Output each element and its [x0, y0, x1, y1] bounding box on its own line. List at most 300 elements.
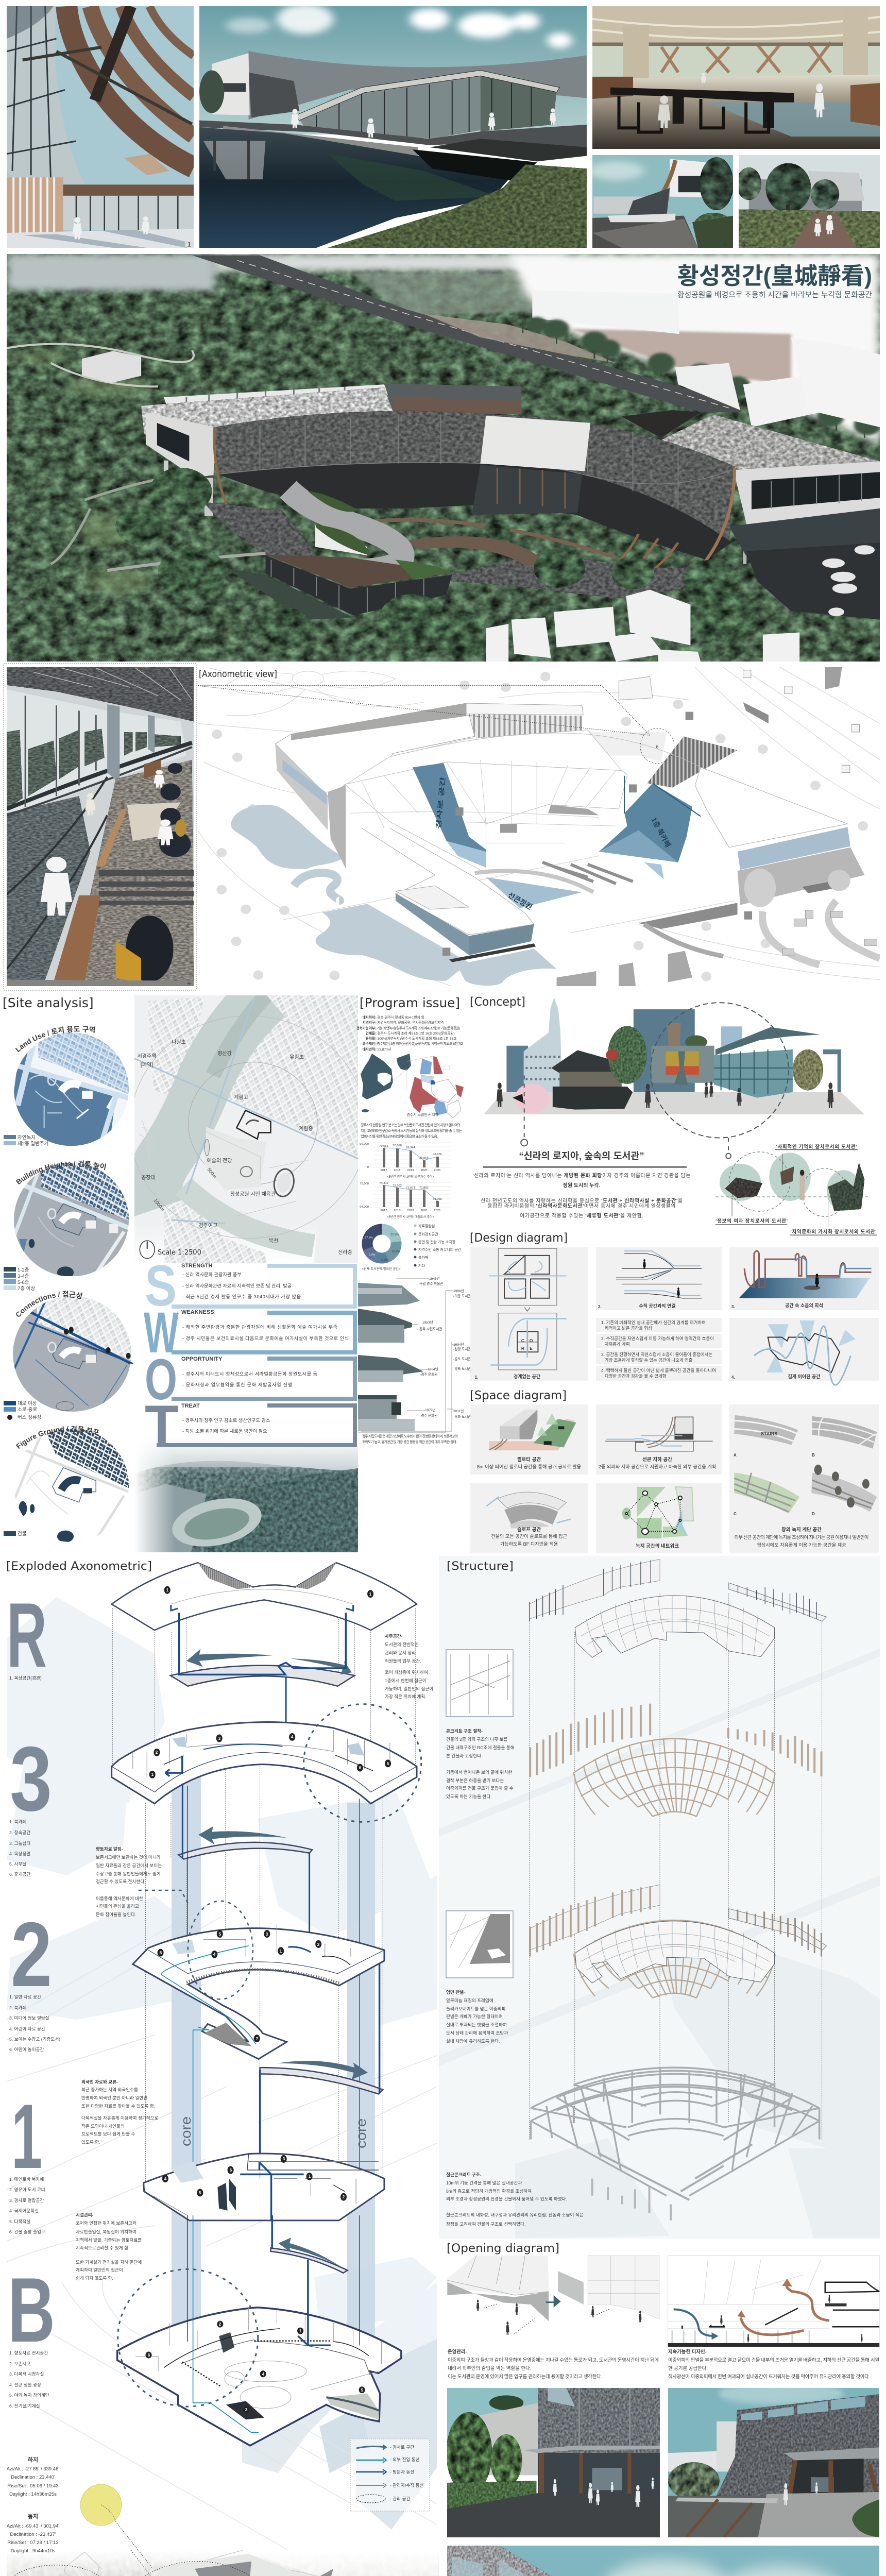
bar chart: visitors: <5년간 경주시 1관당 방문자수 추이>: [387, 1175, 435, 1179]
bar chart: visitors: 43,476: [433, 1153, 442, 1156]
bar chart: book loans: 72,882: [419, 1187, 429, 1190]
map labels: 경주여고: [199, 1222, 217, 1229]
annotation: local materials: 접근할 수 있도록 전시한다.: [96, 1878, 146, 1884]
history of Gyeongju libraries timeline: -의동 도서관: [453, 1294, 471, 1298]
donut chart: 27.6%: [365, 1236, 373, 1240]
space diagram panels: 평상시에도 자유롭게 이용 가능한 공간을 제공: [757, 1543, 846, 1548]
annotation: foreign materials: 또한 다양한 자료를 찾아볼 수 있도록 함.: [81, 2103, 155, 2109]
dotted frame around interior photo: [4, 664, 196, 990]
annotation: foreign materials: 반영하여 외국인 뿐만 아니라 일반인: [81, 2095, 147, 2100]
SWOT text: OPPORTUNITY: [181, 1356, 223, 1362]
room list texts: 6. 휴게공간: [9, 1872, 30, 1877]
annotation: facility management: [76, 2212, 142, 2281]
SWOT text: [181, 1263, 349, 1434]
room number markers on floor plates: 7: [256, 2037, 259, 2041]
space diagram: slope: [486, 1492, 571, 1529]
bar chart: book loans: 2019: [407, 1209, 414, 1212]
opening text: operation management: 운영관리-: [448, 2349, 467, 2354]
annotation: local materials: 문화 참여율을 높인다.: [96, 1911, 136, 1917]
map labels: 나원초: [172, 1039, 186, 1045]
bar chart: visitors: 2017: [381, 1169, 387, 1172]
panel: axonometric view: 6: [656, 744, 659, 749]
design description list: 3. 공간을 진행하면서 지연스럽게 소음이 줄어들어 종점에서는: [601, 1352, 712, 1357]
floor letters and room lists: 1: [11, 2085, 42, 2188]
design diagram panels: C: [521, 1338, 524, 1343]
text: connections title and legend: 대로 이상: [18, 1401, 37, 1406]
space diagram panels: C: [734, 1512, 737, 1516]
room number markers on floor plates: 6: [148, 2353, 150, 2358]
structure heading: [Structure]: [447, 1560, 514, 1573]
donut chart: 15.8%: [380, 1259, 388, 1262]
design description list: 1. 기존의 폐쇄적인 실내 공간에서 실간의 경계를 제거하여: [601, 1320, 706, 1325]
structure background shapes: [439, 1649, 880, 2239]
text: building heights title and legend: 7층 이상: [18, 1286, 35, 1292]
design diagram panels: O: [530, 1338, 533, 1343]
heading: space diagram: [Space diagram]: [470, 1389, 567, 1402]
bar chart: book loans: 2021: [434, 1209, 440, 1212]
annotation: local materials: 일반 자료들과 같은 공간에서 보이는: [96, 1862, 162, 1868]
room list texts: 3. 경사로 열람공간: [9, 2197, 44, 2203]
axonometric labels: [199, 669, 672, 911]
photo 1: interior facade with wooden ribs: 1: [187, 241, 191, 248]
site data table: 대지면적: [363, 1047, 375, 1052]
map labels: 신라중: [338, 1249, 352, 1256]
space diagram: green network: [622, 1487, 693, 1538]
photo: entrance under facade, left: [446, 2388, 660, 2537]
floor letters and room lists: [7, 1584, 60, 2409]
text: building heights title and legend: 5-6층: [18, 1280, 29, 1285]
loose columns: [592, 2179, 671, 2221]
map of Korea and Gyeongju: [361, 1054, 464, 1118]
history of Gyeongju libraries timeline: -경주 문화원: [420, 1413, 437, 1418]
text: building heights title and legend: [4, 1160, 106, 1292]
room list texts: 3. 다목적 시청각실: [9, 2371, 44, 2377]
structure text: facade panel: 입면 판넬-: [446, 1989, 465, 1995]
diagram 4: spaces connected by path: [754, 1320, 856, 1385]
space diagram panels: 창의 녹지 계단 공간: [781, 1527, 822, 1533]
SWOT analysis: [144, 1253, 355, 1458]
site data table: | 가능(자연녹지)/경주시 도시계획 조례 제45조의3호 가능(문화공원): [376, 1026, 460, 1030]
room number markers on floor plates: [148, 1588, 389, 2412]
room number markers on floor plates: 1: [299, 2329, 302, 2333]
room list texts: 1. 향토자료 전시공간: [9, 2350, 48, 2355]
annotation: office space: 도서관의 전반적인: [385, 1641, 419, 1647]
room list texts: 1. 옥상공간(경관): [9, 1675, 42, 1681]
bar chart: book loans: 64,000: [360, 1206, 369, 1209]
circle map: connections: [13, 1296, 133, 1412]
concept sub diagram: three library roles: '사회적인 기억의 장치로서의 도서관': [776, 1144, 857, 1150]
design diagram panels: 3.: [731, 1304, 735, 1309]
history of Gyeongju libraries timeline: 1945년: [429, 1276, 440, 1281]
SWOT text: - 신라 역사문화 관광자원 풍부: [182, 1272, 242, 1277]
circle map: building heights: [14, 1163, 129, 1276]
room number markers on floor plates: 1: [309, 2174, 311, 2179]
SWOT text: - 경주시의 미래도시 정체성으로서 서라벌황금문화 정원도시를 둠: [182, 1371, 317, 1377]
label: north library: 경사로 공간: [435, 776, 447, 829]
structure text: reinforced concrete: 장점을 고려하여 건물의 구조로 선택하였다.: [446, 2221, 525, 2227]
space diagram: piloti: [489, 1410, 576, 1450]
structure text: facade panel: 실내 채광에 유리하도록 한다.: [446, 2038, 500, 2044]
concept statement: 여가공간으로 작용할 수있는 '체류형 도서관'을 제안함.: [520, 1212, 643, 1219]
detail inset boxes: [446, 1650, 513, 1978]
site data table: | 33,870㎡: [376, 1047, 391, 1052]
donut chart: [362, 1224, 462, 1271]
hero subtitle: 황성공원을 배경으로 조용히 시간을 바라보는 누각형 문화공간: [677, 291, 872, 299]
bar chart: visitors: 2018: [394, 1169, 400, 1172]
opening text: operation management: 내려서 외부인의 출입을 막는 역할을 한다.: [448, 2365, 531, 2371]
text: connections title and legend: Connections / 접근성: [16, 1291, 82, 1317]
room list texts: 2. 북카페: [9, 2005, 26, 2010]
design diagram panels: 1.: [475, 1375, 478, 1380]
room list texts: 5. 다목적실: [9, 2218, 30, 2224]
opening diagram: operation: [447, 2256, 659, 2335]
design diagram panels: E: [530, 1346, 533, 1351]
structure text: concrete anchor: [446, 1728, 515, 1799]
diagram 3: immersion of forest sound: [739, 1251, 872, 1298]
annotation: facility management: 지역에서 발굴, 기증되는 향토자료를: [76, 2237, 142, 2243]
history of Gyeongju libraries timeline: 경주 시립도서관은 개관 72년째로 노후화가 많이 진행된 상태이며, 보존서고의: [362, 1434, 458, 1438]
site data table: | 경북 경주시 황성동 954-1번지 외: [376, 1015, 424, 1020]
bar chart: book loans: 74,411: [379, 1182, 388, 1185]
structure text: facade panel: 판넬은 개폐가 가능한 형태이며: [446, 2013, 503, 2019]
solar data text: Declination : -23.437': [10, 2532, 56, 2537]
donut legend: 북카페: [418, 1255, 428, 1260]
text: figure ground title and legend: Figure Ground / 건물 분포: [15, 1426, 99, 1449]
heading: program issue: [Program issue]: [360, 995, 460, 1010]
legend: circulation types: - 외부 진입 동선: [390, 2456, 419, 2462]
room list texts: 6. 건물 중앙 출입구: [9, 2229, 45, 2234]
site data table: | 자연녹지지역, 문화공원, 역사문화환경보존지역: [376, 1020, 444, 1025]
bar chart: visitors: 0: [367, 1166, 369, 1169]
opening text: sustainable design: 한 공기를 공급한다.: [668, 2365, 708, 2371]
room number markers on floor plates: 3: [218, 1736, 221, 1741]
annotation: facility management: 계획하여 일반인의 접근이: [76, 2267, 123, 2273]
design description list: 4. 빽빽하게 들친 공간이 아닌 넓게 흩뿌려진 공간을 돌아다니며: [601, 1368, 716, 1373]
room number markers on floor plates: 5: [199, 2191, 201, 2195]
opening text: sustainable design: [668, 2349, 879, 2379]
structure text: concrete anchor: 있도록 하는 기능을 한다.: [446, 1793, 492, 1799]
room list texts: 5. 보이는 수장고 (기증도서): [9, 2037, 60, 2042]
design diagram panels: 4.: [731, 1375, 735, 1380]
room list texts: 4. 선큰 정원 광장: [9, 2382, 41, 2387]
map labels: [폐역]: [141, 1062, 153, 1068]
bar chart: visitors: 69,344: [406, 1146, 416, 1149]
map labels: 500m: [206, 1167, 217, 1179]
solar data text: 동지: [28, 2513, 38, 2520]
SWOT letters: W: [144, 1300, 179, 1365]
map labels: 1000m: [152, 1198, 165, 1212]
map labels: 공장대: [141, 1175, 156, 1181]
annotation: facility management: 지속적으로관리할 수 있게 함.: [76, 2245, 129, 2250]
photo 6: long curved reading corridor: [7, 667, 194, 986]
solar data text: 하지: [28, 2456, 38, 2463]
annotation: office space: 코어 최상층에 위치하여: [385, 1669, 428, 1675]
concept statement: [473, 1150, 690, 1219]
annotation: foreign materials: [81, 2079, 159, 2145]
site data table: [356, 1015, 463, 1052]
room number markers on floor plates: 1: [166, 1588, 169, 1592]
design diagram panels: [470, 1247, 879, 1385]
history of Gyeongju libraries timeline: 1994년: [453, 1342, 464, 1347]
core columns: [172, 1773, 375, 2353]
heading: design diagram: [Design diagram]: [470, 1231, 568, 1245]
map labels: 계림고: [234, 1094, 248, 1100]
design description list: 다양한 공간과 경관을 볼 수 있게함: [605, 1374, 667, 1379]
space diagram panels: STAIRS: [761, 1431, 777, 1436]
third floor plate: [112, 1722, 417, 1804]
room list texts: 4. 옥상정원: [9, 1851, 30, 1856]
room list texts: 2. 정숙공간: [9, 1830, 30, 1835]
panel: axonometric view: [198, 667, 880, 986]
heading: opening diagram: [Opening diagram]: [447, 2242, 559, 2255]
photo 4: rib corner of the building: 4: [723, 241, 727, 248]
floor letters and room lists: 2: [11, 1903, 52, 2006]
caption and paragraph: population: 경주시의 현중원 인구 분포는 향후 복합문화도서관 건립에 있어 지방소멸지역의: [361, 1123, 461, 1127]
structure text: concrete anchor: 기둥에서 뻗어나온 보의 끝에 위치한: [446, 1770, 512, 1775]
heading: exploded axonometric: [Exploded Axonometric]: [6, 1560, 152, 1573]
space diagram panels: D: [812, 1512, 815, 1516]
concept sub diagram: three library roles: [715, 1144, 877, 1235]
annotation: local materials: 시민들의 관심을 올리고: [96, 1904, 139, 1909]
hero title: 황성정간(皇城靜看): [677, 263, 872, 289]
legend: circulation types: - 관리 공간: [390, 2496, 410, 2501]
room number markers on floor plates: 1: [151, 1772, 154, 1777]
map labels: 북천: [269, 1238, 278, 1244]
annotation: office space: 가능하며, 일반인의 접근이: [385, 1686, 433, 1691]
ramp band between floors 3 and 2: [179, 1784, 360, 2192]
bar chart: visitors: [360, 1143, 451, 1179]
SWOT letters: [144, 1253, 179, 1458]
floor letters and room lists: 3: [10, 1727, 52, 1830]
caption and paragraph: population: '압축시티'를 위한 장소선처에 있어서 중요한 요소가 될 수 있음.: [361, 1134, 438, 1139]
bar chart: visitors: 2019: [407, 1169, 414, 1172]
design diagram panels: 공간 속 소음의 희석: [785, 1302, 823, 1308]
heading: site analysis: [Site analysis]: [3, 995, 94, 1010]
opening text: sustainable design: 이중외피의 판넬을 부분적으로 열고 닫으며 건물 내부의 뜨거운 열기를 배출하고, 지하의 선큰 공간을 통해 시원: [668, 2357, 879, 2363]
structure exploded drawing: [530, 1560, 827, 2221]
annotation: office space: 사무공간-: [385, 1634, 403, 1639]
room list texts: 4. 국제어문학실: [9, 2208, 39, 2213]
history of Gyeongju libraries timeline: -칠평 도서관: [453, 1347, 471, 1351]
room number markers on floor plates: 1: [369, 1592, 372, 1597]
structure text: concrete anchor: 결착 부분은 하중을 받기 보다는: [446, 1778, 504, 1783]
text: land use title and legend: 제2종 일반주거: [18, 1141, 48, 1147]
opening text: operation management: 이중외피 구조가 들창과 같이 작용하여 운영중에는 지나갈 수있는 통로가 되고, 도서관의 운영시간이 지난 뒤에: [448, 2357, 659, 2363]
room number markers on floor plates: 4: [213, 1952, 216, 1957]
room number markers on floor plates: 4: [164, 2177, 167, 2181]
axonometric labels: [Axonometric view]: [199, 669, 277, 680]
room list texts: 5. 야외 녹지 창의계단: [9, 2392, 49, 2398]
SWOT text: - 쾌적한 주변환경과 충분한 관광자원에 비해 생활문화 예술 여가시설 부족: [182, 1324, 337, 1330]
structure text: facade panel: 알루미늄 재질의 프레임에: [446, 1997, 493, 2003]
assembled screen and ribs: [530, 1885, 827, 1998]
SWOT text: STRENGTH: [181, 1263, 213, 1269]
room number markers on floor plates: 6: [359, 1766, 362, 1770]
design description list: 가장 조용하게 휴식할 수 있는 공간이 나오게 연출: [605, 1358, 693, 1363]
annotation: facility management: 자료반출입실, 복원실이 위치하여: [76, 2229, 137, 2234]
room number markers on floor plates: 2: [219, 2322, 222, 2327]
basement floor plate: [117, 2215, 401, 2446]
structure text: reinforced concrete: 10m위 기둥 간격을 통해 넓은 실내공간과: [446, 2180, 522, 2185]
solar data text: Daylight : 9h44m10s: [11, 2548, 56, 2554]
annotation: foreign materials: 외국인 자료와 교류-: [81, 2079, 118, 2084]
design diagram panels: 수직 공간과의 연결: [639, 1303, 676, 1309]
bar chart: book loans: <5년간 경주시 1관당 대출도서 추이>: [387, 1215, 435, 1219]
annotation: foreign materials: 작은 모임이나 개인들의: [81, 2123, 125, 2129]
annotation: foreign materials: 최근 증가하는 지역 외국인수를: [81, 2087, 138, 2092]
history of Gyeongju libraries timeline: 1964년: [428, 1367, 438, 1371]
structure text: facade panel: [446, 1989, 508, 2044]
SWOT letters: T: [145, 1394, 179, 1458]
SWOT text: - 최근 5년간 경제 활동 인구수 중 3040세대가 가장 많음: [182, 1294, 301, 1299]
bar chart: visitors: 77,600: [393, 1144, 402, 1147]
design description list: 자유롭게 계획: [605, 1342, 630, 1347]
history of Gyeongju libraries timeline: -송화 도서관: [453, 1414, 471, 1419]
room number markers on floor plates: 2: [343, 2195, 345, 2199]
opening text: operation management: [448, 2349, 659, 2379]
history of Gyeongju libraries timeline: -경주 문화원: [420, 1372, 437, 1377]
history of Gyeongju libraries timeline: [358, 1276, 471, 1444]
SWOT text: - 경주시의 정주 인구 감소로 생산인구도 감소: [182, 1417, 270, 1423]
room number markers on floor plates: 3: [266, 1932, 268, 1937]
caption and paragraph: population: [361, 1112, 462, 1139]
solar data text: [7, 2456, 59, 2554]
core labels: core: [354, 2119, 368, 2148]
map labels: Scale 1:2500: [158, 1249, 201, 1257]
history of Gyeongju libraries timeline: 포화도가 높고, 휴게공간 및 개방 공간 활용을 위한 공간이 매우 부족한 상태.: [362, 1439, 457, 1444]
photo 5: garden path with pedestrians: [739, 155, 880, 248]
bar chart: book loans: 73,702: [393, 1184, 402, 1188]
annotation: office space: 직원들의 업무 공간.: [385, 1658, 421, 1664]
bar chart: visitors: 79,666: [379, 1145, 388, 1148]
room list texts: 2. 보존서고: [9, 2361, 30, 2366]
annotation: facility management: 또한 기계실과 전기실을 지하 말단에: [76, 2259, 142, 2265]
space diagram panels: A: [734, 1453, 737, 1458]
room number markers on floor plates: 4: [291, 1735, 294, 1739]
annotation: facility management: 시설관리-: [76, 2212, 94, 2217]
solar data text: Rise/Set : 05:06 / 19:43: [7, 2483, 59, 2489]
solar data text: Declination : 23.440': [11, 2475, 55, 2480]
history of Gyeongju libraries timeline: -양북 도서관: [453, 1366, 471, 1371]
structure text: concrete anchor: 이중외피를 건물 구조가 붙잡아 줄 수: [446, 1785, 514, 1791]
concept sub diagram: three library roles: '정보의 여과 장치로서의 도서관': [715, 1218, 788, 1224]
top screen strip: [530, 1560, 827, 1621]
room number markers on floor plates: 4: [262, 2372, 265, 2377]
room list texts: 3. 미디어 정보 열람실: [9, 2015, 49, 2021]
concept statement: 정원 도시의 누각.: [563, 1182, 601, 1189]
inset 2: facade panel: [446, 1911, 513, 1978]
design diagram panels: R: [521, 1346, 524, 1351]
structure text: facade panel: 폴리카보네이트를 덮은 이중외피: [446, 2006, 505, 2011]
donut legend: 문화강좌공간: [418, 1232, 438, 1236]
site data table: | 100%(자연녹지)/경주시 도시계획 조례 제86조 1항 16호: [376, 1036, 456, 1041]
donut legend: [362, 1224, 462, 1271]
text: land use title and legend: Land Use / 토지 용도 구역: [15, 1026, 95, 1052]
map labels: 형산강: [217, 1050, 232, 1057]
room number markers on floor plates: 2: [156, 1750, 158, 1755]
text: connections title and legend: [4, 1291, 82, 1420]
opening text: operation management: 이는 도서관의 운영에 있어서 많은 입구를 관리하는데 용이할 것이라고 생각한다.: [448, 2374, 602, 2379]
annotation: local materials: [96, 1846, 162, 1917]
room list texts: 1. 일반 자료 공간: [9, 1994, 41, 1999]
map labels: 유림초: [289, 1054, 304, 1060]
donut legend: 자료열람실: [418, 1224, 435, 1228]
structure text: concrete anchor: 본 건물과 고정한다.: [446, 1753, 482, 1758]
concept collage illustration: [484, 997, 864, 1159]
room number markers on floor plates: 2: [317, 1942, 320, 1947]
circle map: land use: [14, 1032, 129, 1146]
text: connections title and legend: 소로-중로: [18, 1407, 37, 1413]
first floor plate: [144, 2154, 384, 2221]
concept statement: “신라의 로지아, 숲속의 도서관”: [519, 1150, 644, 1161]
structure text: concrete anchor: 건물 내력구조인 RC조에 철물을 통해: [446, 1744, 515, 1750]
photo 5: garden path with pedestrians: 5: [741, 241, 745, 248]
donut chart: 22.9%: [390, 1233, 399, 1236]
concept sub diagram: three library roles: '지역문화의 가시화 장치로서의 도서관': [790, 1229, 877, 1235]
label: first floor cafe: 1층 북카페: [650, 816, 672, 849]
site data table: 지역지구: [363, 1020, 375, 1025]
ramp band between floors 2 and 1: [193, 1963, 383, 2221]
opening diagram: sustainable ventilation section: [668, 2256, 879, 2347]
text: building heights title and legend: Building Heights / 건물 높이: [15, 1160, 106, 1185]
panel: exploded axonometric background: [7, 1556, 437, 2576]
heading: concept: [Concept]: [470, 995, 525, 1009]
annotation: local materials: 수장고를 통해 일반인들에게도 쉽게: [96, 1871, 161, 1876]
solar path: summer and winter suns: [7, 2484, 152, 2576]
caption and paragraph: population: 지방 고령화와 인구감소 속에서 도시기능의 집적화 네트워크에 활기를 줄 수 있는: [361, 1128, 462, 1133]
structure text: reinforced concrete: 외부 조경과 황성공원의 전경을 건물에서 품어낼 수 있도록 하였다.: [446, 2196, 567, 2201]
ramp band under roof: [171, 1613, 354, 1752]
design description list: 쾌적하고 넓은 공간을 형성: [605, 1326, 652, 1331]
administrative zone dashed circle: [304, 1704, 421, 1822]
bar chart: book loans: 2017: [381, 1209, 387, 1212]
annotation: office space: 관리와 문서 정리: [385, 1650, 416, 1655]
site data table: | 경주시 도시계획 조례 제61조 1항 16호 20%(문화공원): [376, 1031, 455, 1036]
bar chart: visitors: 2020: [421, 1169, 427, 1172]
space diagram: outdoor green stairs A B C D: [734, 1415, 877, 1514]
room list texts: 6. 전기실/기계실: [9, 2403, 40, 2409]
opening text: sustainable design: 지속가능한 디자인-: [668, 2349, 707, 2354]
photo 6: long curved reading corridor: 6: [188, 982, 192, 985]
label: sunken garden: 선큰정원: [507, 891, 534, 911]
space diagram panels: 2중 외피와 지하 공간으로 시원하고 아늑한 외부 공간을 계획: [599, 1464, 716, 1469]
design diagram panels: 길게 이어진 공간: [788, 1374, 821, 1379]
space diagram panels: 필로티 공간: [517, 1456, 541, 1463]
space diagram panels: [470, 1404, 879, 1553]
annotation: foreign materials: 프로젝트를 보다 쉽게 만들 수: [81, 2131, 135, 2137]
photo: low view of curved facade and sky: [447, 2546, 881, 2576]
structure text: concrete anchor: 콘크리트 구조 결착-: [446, 1728, 483, 1734]
site data table: 건폐율: [366, 1031, 375, 1036]
opening text: sustainable design: 직사광선이 이중외피에서 한번 여과되어 실내공간이 뜨거워지는 것을 막아주어 유지관리에 용의할 것이다.: [668, 2374, 870, 2379]
history of Gyeongju libraries timeline: -국립 경주 박물관: [418, 1281, 443, 1286]
solar data text: Daylight : 14h36m25s: [9, 2492, 57, 2497]
history of Gyeongju libraries timeline: 1988년: [453, 1289, 464, 1293]
design description list: 2. 수직공간을 자연스럽게 이동 가능하게 하여 영역간의 흐름이: [601, 1336, 714, 1341]
annotation: foreign materials: 다목적실을 자유롭게 이용하며 정기적으로: [81, 2115, 159, 2121]
legend: circulation types: - 관리자/수직 동선: [390, 2483, 423, 2488]
core labels: [179, 2116, 368, 2148]
room list texts: 2. 영유아 도서 코너: [9, 2187, 45, 2192]
exploded axonometric floor plates: [112, 1563, 421, 2221]
donut legend: <현재 도서관에 필요한 공간>: [362, 1267, 401, 1271]
structure text: reinforced concrete: [446, 2172, 584, 2227]
wood posts row: [530, 1704, 822, 1777]
structure text: reinforced concrete: 철근콘크리트 구조-: [446, 2172, 482, 2177]
space diagram panels: 가능하도록 BF 디자인을 적용: [500, 1541, 558, 1547]
annotation: office space: [385, 1634, 433, 1699]
text: building heights title and legend: 3-4층: [18, 1274, 29, 1279]
